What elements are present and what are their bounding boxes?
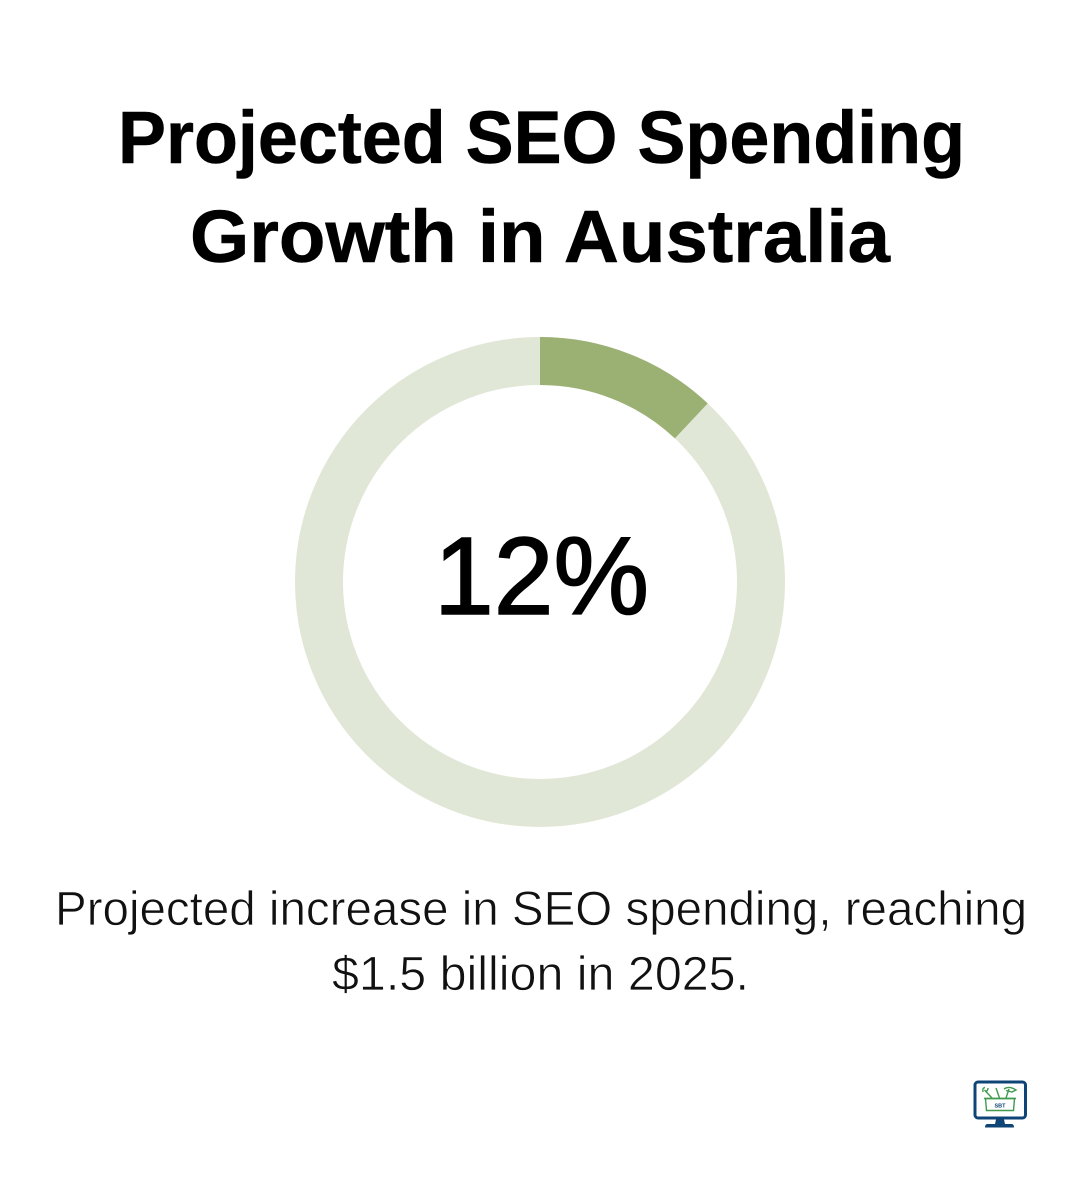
toolbox label: SBT <box>994 1104 1006 1110</box>
title <box>118 96 965 278</box>
donut segment: 12% <box>540 361 691 421</box>
description <box>55 883 1027 1001</box>
icon: SBT monitor toolbox logo <box>975 1082 1026 1128</box>
title: Projected SEO Spending <box>118 96 965 179</box>
description: $1.5 billion in 2025. <box>332 948 749 1001</box>
monitor frame <box>975 1082 1026 1118</box>
donut track <box>319 361 761 803</box>
center value: 12% <box>434 515 649 638</box>
title: Growth in Australia <box>190 195 891 278</box>
description: Projected increase in SEO spending, reaching <box>55 883 1027 936</box>
donut chart <box>319 361 761 803</box>
toolbox <box>983 1087 1016 1110</box>
monitor stand <box>985 1120 1014 1128</box>
